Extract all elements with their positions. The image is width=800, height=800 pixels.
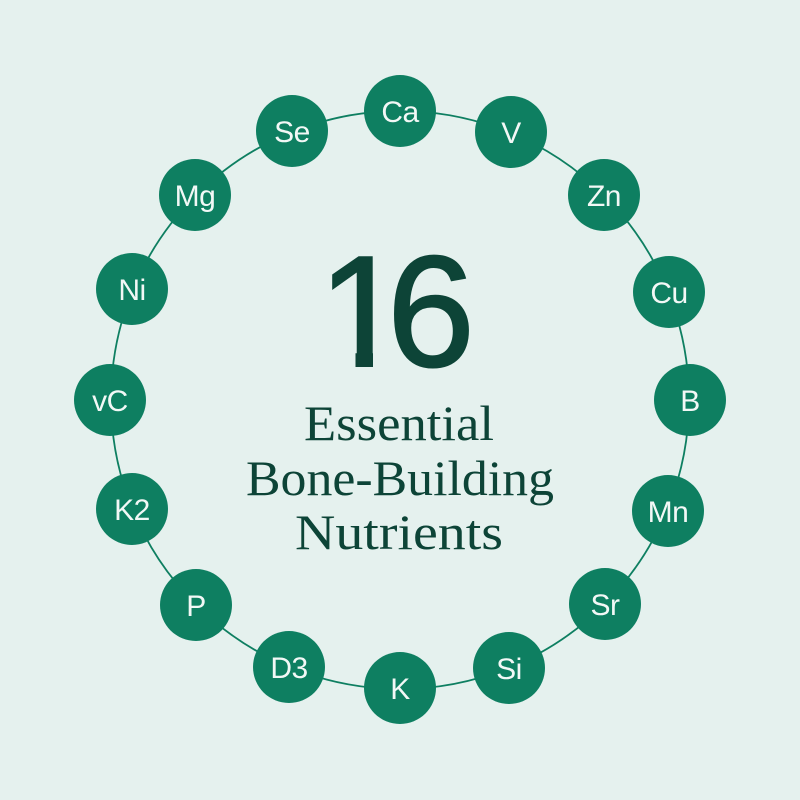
node: Zn: Zn [587,180,621,213]
node: Se: Se [274,116,310,149]
node: Cu: Cu [650,277,688,310]
node: vC [74,364,146,436]
node: Sr [569,568,641,640]
node: P [160,569,232,641]
node: K2 [96,473,168,545]
node: Cu [633,256,705,328]
node: Zn [568,159,640,231]
node: V [475,96,547,168]
node: Mg: Mg [175,180,215,213]
node: Si [473,632,545,704]
node: Ni: Ni [118,274,146,307]
node: B: B [680,385,700,418]
node: vC: vC [92,385,128,418]
node: P: P [186,590,206,623]
headline number: 6 [387,224,475,400]
headline number [332,254,469,368]
headline number: 1 [318,224,406,400]
subtitle line 3: Nutrients [295,504,503,560]
ring line [111,111,689,689]
node: Ca: Ca [381,96,419,129]
node: Se [256,95,328,167]
node: Si: Si [496,653,522,686]
node: Mg [159,159,231,231]
node: Mn: Mn [648,496,688,529]
node: D3 [253,631,325,703]
nutrient nodes [74,75,726,724]
node: K [364,652,436,724]
node: Sr: Sr [590,589,620,622]
node: B [654,364,726,436]
node: V: V [501,117,521,150]
node: K2: K2 [114,494,150,527]
node: D3: D3 [270,652,308,685]
subtitle line 2: Bone-Building [246,450,554,506]
node: Mn [632,475,704,547]
node: Ca [364,75,436,147]
node: Ni [96,253,168,325]
subtitle [246,395,554,560]
subtitle line 1: Essential [304,395,494,451]
node: K: K [390,673,410,706]
